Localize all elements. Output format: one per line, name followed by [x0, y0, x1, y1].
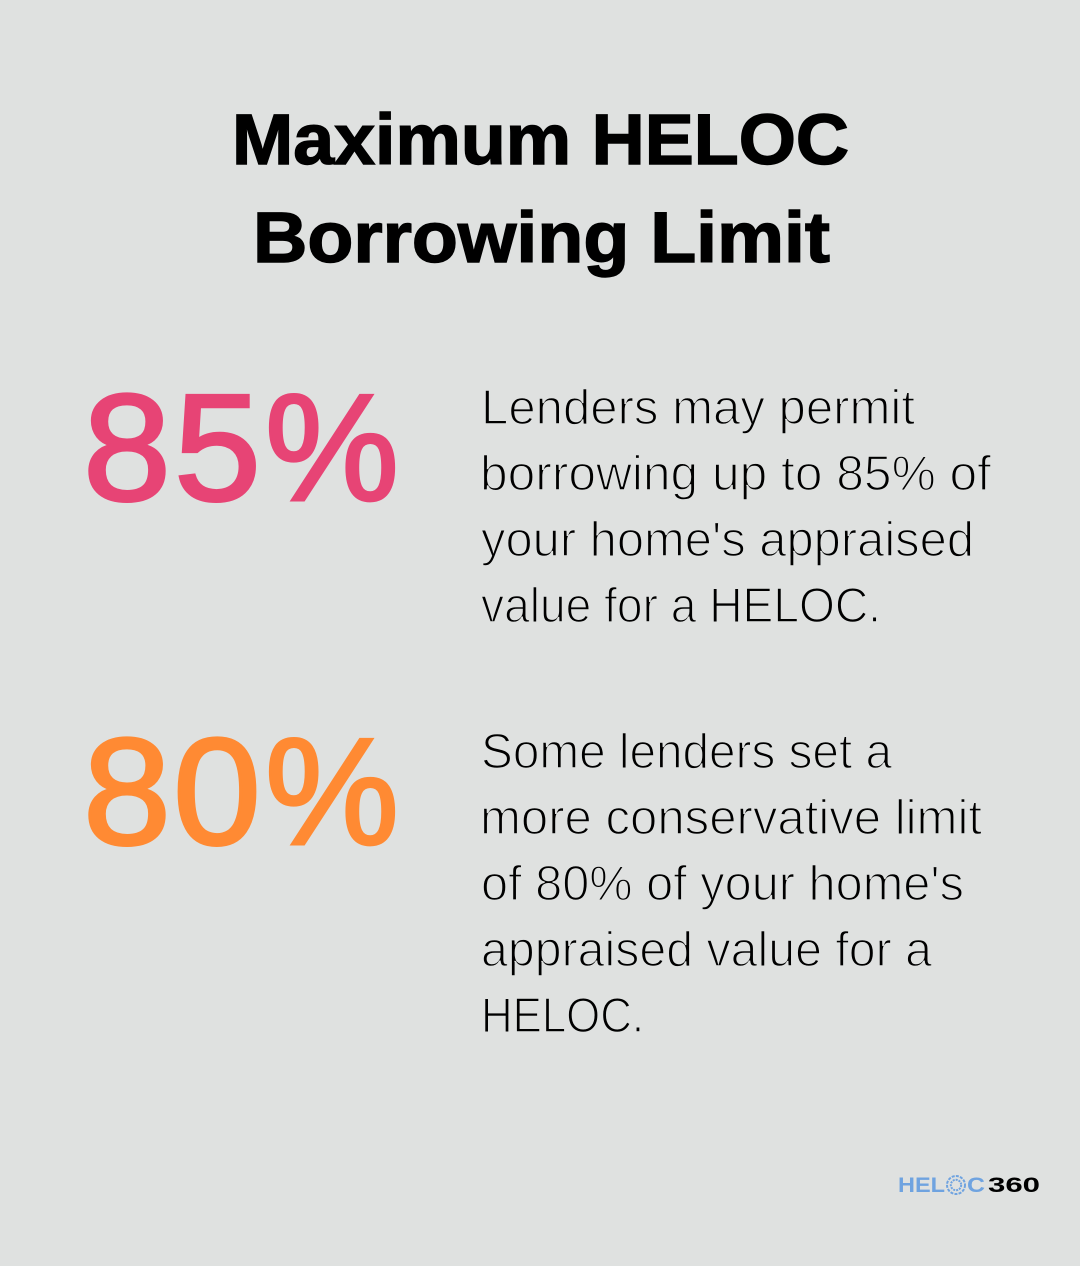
statistic: 85%: % — [265, 363, 399, 533]
icon: swirl letter O — [947, 1176, 965, 1194]
text block: 80% description: HELOC. — [481, 989, 644, 1043]
logo: HELOC360 — [898, 1174, 1040, 1197]
text block: 80% description: more conservative limit — [480, 791, 982, 845]
statistic: 85%: 8 — [83, 363, 171, 533]
statistic: 85%: 5 — [174, 363, 261, 533]
text block: 85% description: your home's appraised — [481, 513, 974, 567]
statistic: 80%: 0 — [173, 707, 261, 877]
statistic: 80%: % — [265, 707, 399, 877]
title: Maximum HELOC — [232, 101, 849, 180]
text block: 80% description: Some lenders set a — [481, 725, 893, 779]
statistic: 80% — [83, 707, 399, 877]
text block: 85% description: value for a HELOC. — [481, 579, 881, 633]
title — [232, 101, 849, 278]
logo: HELOC360: 360 — [988, 1174, 1040, 1197]
text block: 80% description: appraised value for a — [481, 923, 933, 977]
statistic: 80%: 8 — [83, 707, 171, 877]
text block: 85% description: Lenders may permit — [481, 381, 915, 435]
logo: HELOC360: HEL — [898, 1174, 945, 1197]
text block: 80% description: of 80% of your home's — [481, 857, 964, 911]
statistic: 85% — [83, 363, 399, 533]
title: Borrowing Limit — [253, 199, 830, 278]
text block: 85% description — [480, 381, 991, 633]
text block: 85% description: borrowing up to 85% of — [480, 447, 991, 501]
text block: 80% description — [480, 725, 982, 1043]
logo: HELOC360: C — [967, 1174, 985, 1197]
